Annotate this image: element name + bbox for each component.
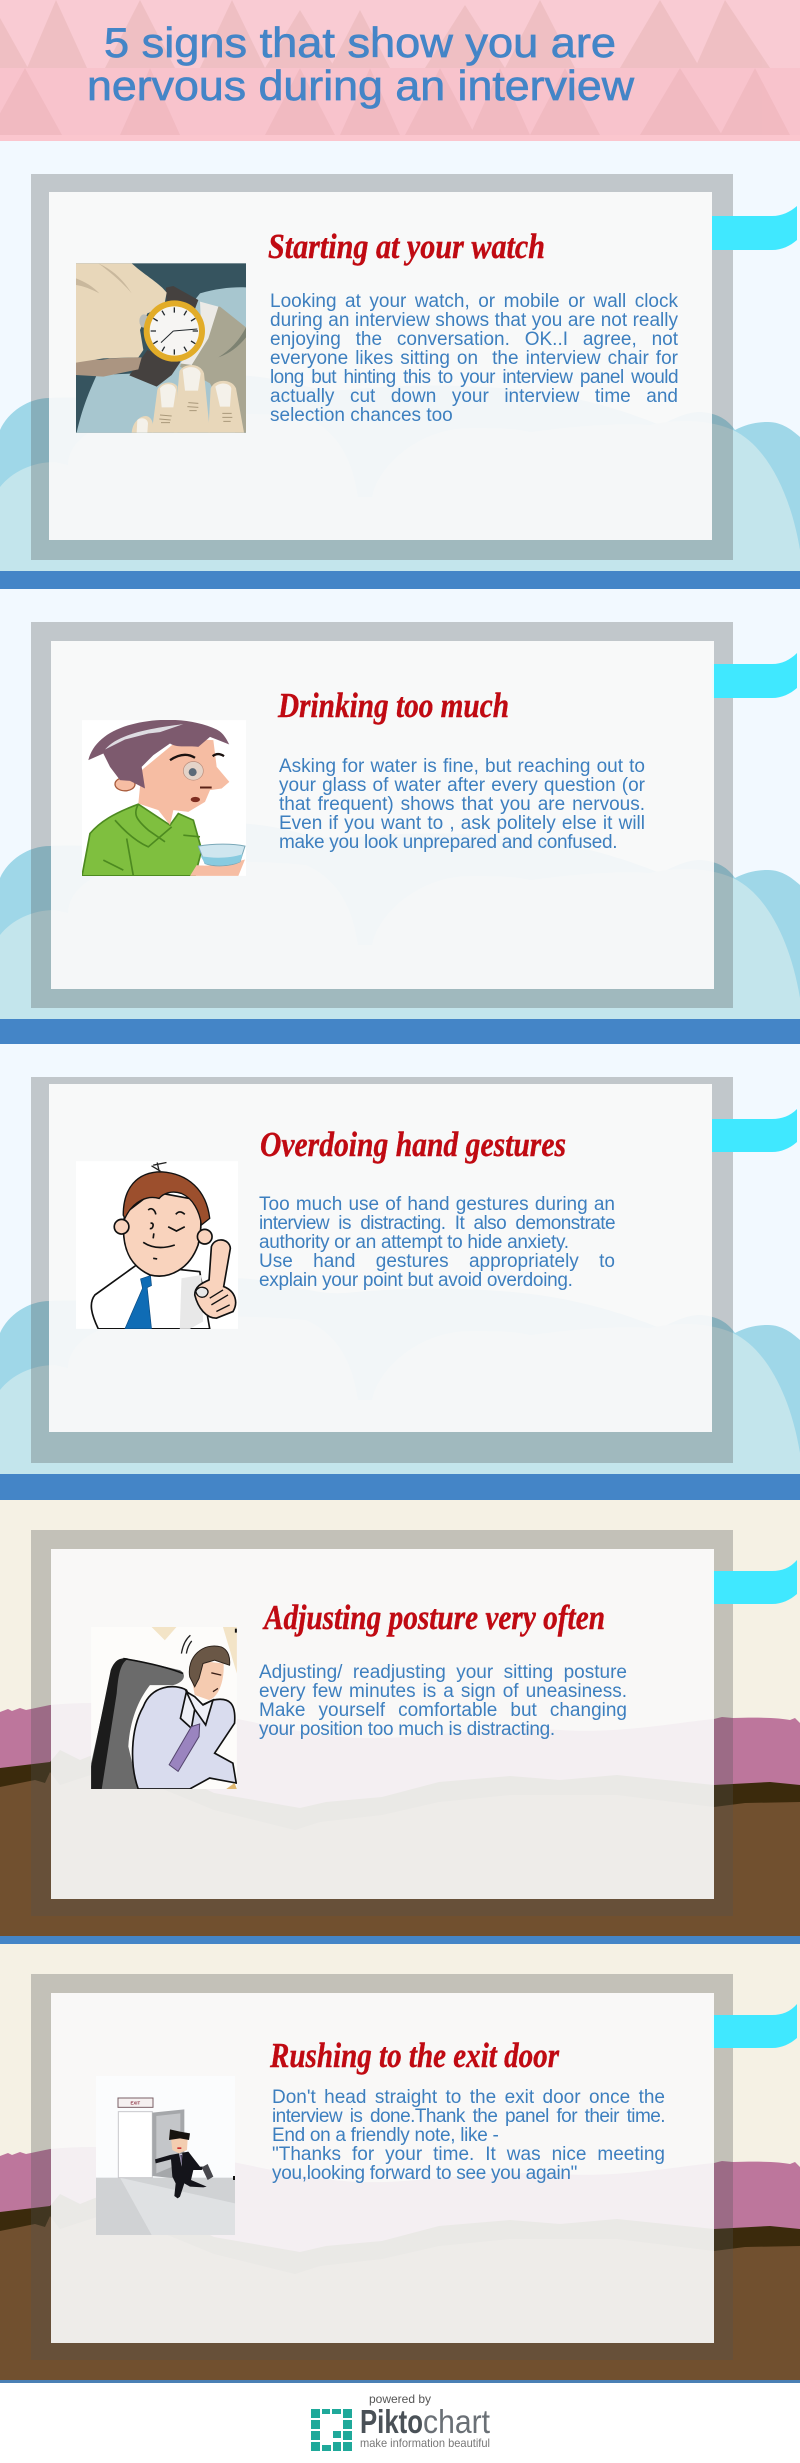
- band: [0, 1019, 800, 1044]
- heading: Overdoing hand gestures: [260, 1125, 566, 1164]
- body text 1: [270, 291, 678, 426]
- body text 5: Don't head straight to the exit door once the: [272, 2087, 665, 2108]
- logo wordmark: Pikto: [360, 2403, 423, 2440]
- body text 5: you,looking forward to see you again": [272, 2163, 577, 2184]
- section 2 background with clouds: [0, 589, 800, 1019]
- ribbon: [712, 1560, 797, 1604]
- body text 1: actually cut down your interview time and: [270, 386, 678, 407]
- body text 1: during an interview shows that you are not really: [270, 310, 678, 331]
- body text 5: End on a friendly note, like -: [272, 2125, 499, 2146]
- body text 4: your position too much is distracting.: [259, 1719, 555, 1740]
- illustration: watch on wrist: [76, 263, 246, 433]
- body text 2: make you look unprepared and confused.: [279, 832, 617, 853]
- panel 1: [31, 174, 797, 560]
- body text 4: every few minutes is a sign of uneasiness.: [259, 1681, 627, 1702]
- body text 1: Looking at your watch, or mobile or wall clock: [270, 291, 678, 312]
- body text 5: [272, 2087, 665, 2184]
- title: 5 signs that show you are: [104, 19, 616, 66]
- body text 2: Even if you want to , ask politely else it will: [279, 813, 645, 834]
- heading: Starting at your watch: [268, 227, 545, 266]
- ribbon: [712, 2004, 797, 2048]
- body text 3: [259, 1194, 615, 1291]
- body text 2: your glass of water after every question (or: [279, 775, 645, 796]
- body text 2: [279, 756, 645, 853]
- title: [87, 19, 635, 109]
- ribbon: [712, 206, 797, 250]
- panel 2: [31, 622, 797, 1008]
- ribbon: [712, 1109, 797, 1152]
- body text 3: interview is distracting. It also demonstrate: [259, 1213, 615, 1234]
- powered by: powered by: [369, 2392, 431, 2406]
- illustration: man pointing finger: [76, 1162, 238, 1329]
- body text 1: selection chances too: [270, 405, 453, 426]
- band: [0, 1936, 800, 1944]
- illustration: man rushing out of exit door: EXIT: [131, 2100, 140, 2105]
- heading: Adjusting posture very often: [262, 1598, 605, 1637]
- section 5 background with hills: [0, 1944, 800, 2380]
- band: [0, 2380, 800, 2383]
- footer logo: Piktochart: [311, 2392, 490, 2451]
- illustration: nervous man with glass of water: [82, 720, 246, 876]
- heading: Rushing to the exit door: [269, 2036, 559, 2075]
- band: [0, 571, 800, 589]
- section 4 background with hills: [0, 1500, 800, 1936]
- heading: Drinking too much: [277, 686, 509, 725]
- logo icon: [311, 2409, 352, 2451]
- body text 1: everyone likes sitting on the interview chair for: [270, 348, 678, 369]
- illustration: man rushing out of exit door: [96, 2098, 235, 2235]
- title: nervous during an interview: [87, 62, 635, 109]
- illustration: man in office chair: [91, 1627, 237, 1789]
- body text 4: Adjusting/ readjusting your sitting posture: [259, 1662, 627, 1683]
- ribbon: [712, 653, 797, 698]
- panel 3: [31, 1077, 797, 1463]
- body text 3: Too much use of hand gestures during an: [259, 1194, 615, 1215]
- body text 5: interview is done.Thank the panel for their time.: [272, 2106, 665, 2127]
- body text 2: that frequent) shows that you are nervous.: [279, 794, 645, 815]
- panel 4: [31, 1530, 797, 1916]
- body text 3: authority or an attempt to hide anxiety.: [259, 1232, 569, 1253]
- body text 3: Use hand gestures appropriately to: [259, 1251, 615, 1272]
- body text 4: [259, 1662, 627, 1740]
- body text 1: long but hinting this to your interview panel would: [270, 367, 678, 388]
- body text 3: explain your point but avoid overdoing.: [259, 1270, 573, 1291]
- body text 2: Asking for water is fine, but reaching out to: [279, 756, 645, 777]
- body text 4: Make yourself comfortable but changing: [259, 1700, 627, 1721]
- body text 5: "Thanks for your time. It was nice meeting: [272, 2144, 665, 2165]
- section 1 background with clouds: [0, 141, 800, 571]
- footer logo: Piktochart: chart: [423, 2403, 490, 2440]
- header banner: [0, 0, 800, 141]
- panel 5: [31, 1974, 797, 2360]
- tagline: make information beautiful: [360, 2436, 490, 2450]
- body text 1: enjoying the conversation. OK..I agree, not: [270, 329, 678, 350]
- section 3 background with clouds: [0, 1044, 800, 1474]
- band: [0, 1474, 800, 1500]
